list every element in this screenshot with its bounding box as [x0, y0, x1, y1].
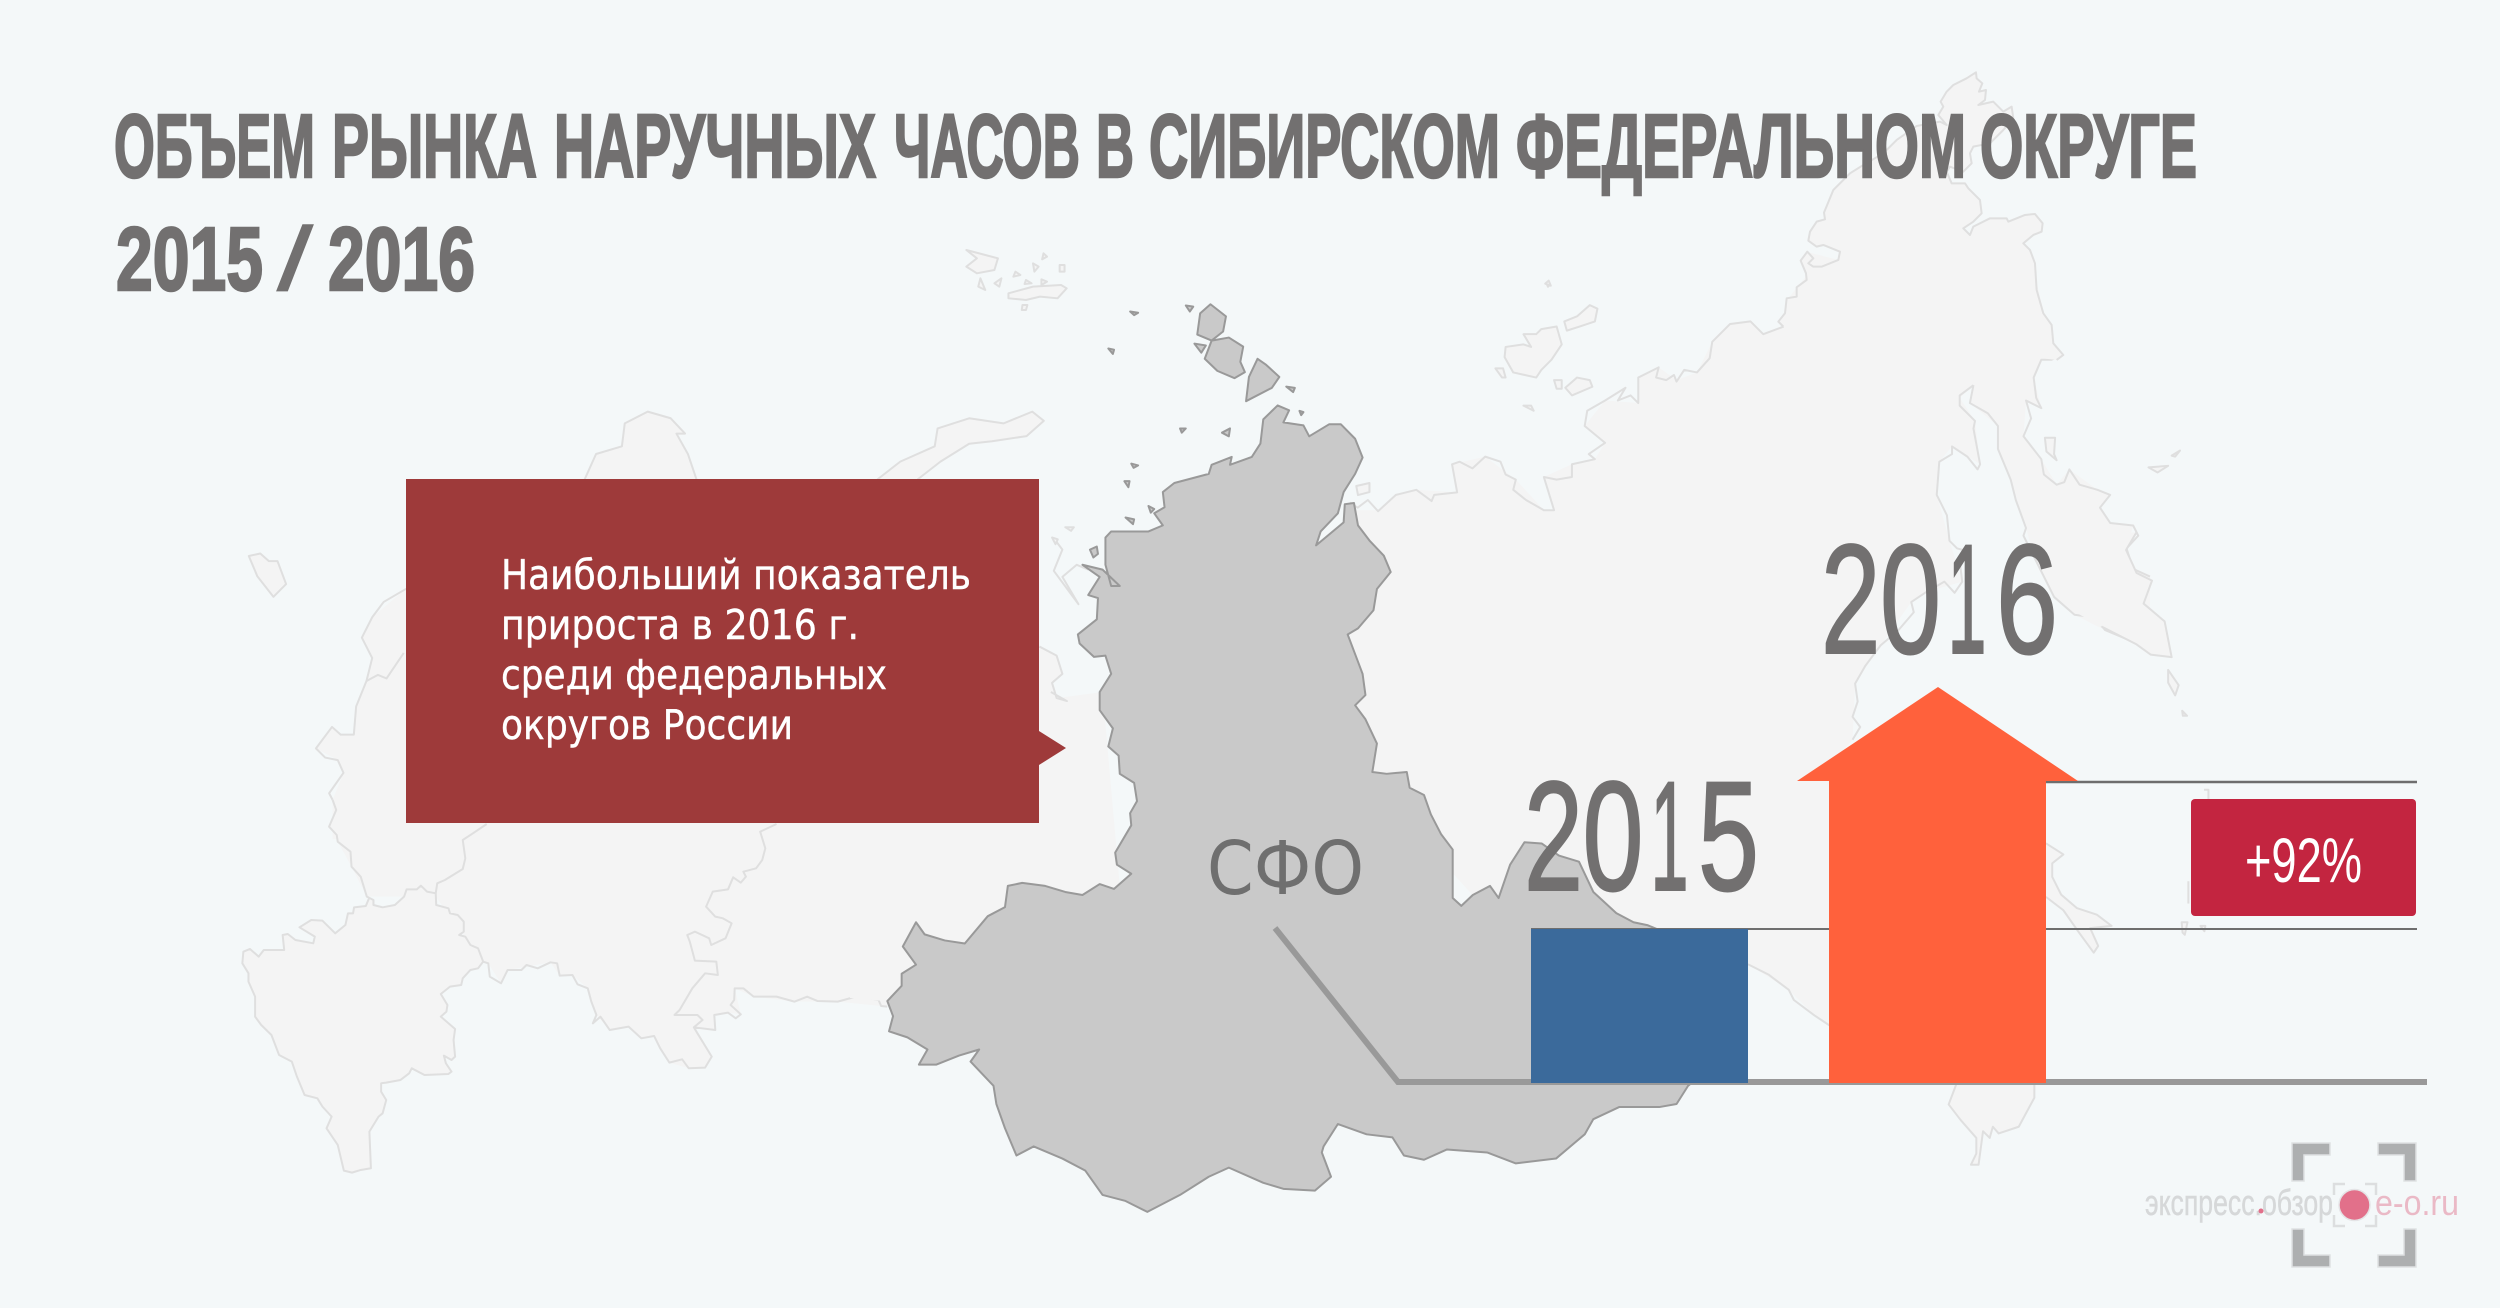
- map: Russia background: [242, 72, 2208, 1173]
- year label 2016: 2: [1821, 513, 1880, 687]
- year label 2015: 2: [1524, 750, 1583, 924]
- title: /: [277, 210, 313, 310]
- title: ОБЪЕМ: [114, 97, 315, 197]
- title: РЫНКА: [332, 97, 537, 197]
- year label 2015: 0: [1582, 750, 1644, 924]
- guide line: 2016 level: [2046, 781, 2417, 783]
- title: 2016: [328, 210, 475, 310]
- logo: express-obzor: e-o.ru: [2375, 1182, 2459, 1223]
- year label 2016: [1821, 513, 2058, 687]
- title: ЧАСОВ: [894, 97, 1080, 197]
- year label 2016: 0: [1880, 513, 1941, 687]
- title: НАРУЧНЫХ: [554, 97, 876, 197]
- callout: largest growth: среди федеральных: [501, 651, 887, 699]
- badge: +92%: +92%: [2245, 826, 2362, 896]
- district label: СФО: [1207, 826, 1364, 912]
- leader line from district label to chart baseline: [1275, 928, 2427, 1082]
- year label 2016: 6: [1996, 513, 2058, 687]
- year label 2015: 1: [1650, 750, 1688, 924]
- title: 2015: [116, 210, 263, 310]
- callout: largest growth: Наибольший показатель: [501, 551, 971, 599]
- year label 2015: [1524, 750, 1759, 924]
- title: В: [1096, 97, 1134, 197]
- bar: 2015: [1531, 929, 1748, 1083]
- arrow bar: 2016: [1797, 687, 2078, 1083]
- year label 2015: 5: [1698, 750, 1759, 924]
- title: ОКРУГЕ: [1980, 97, 2197, 197]
- callout: largest growth: округов России: [501, 701, 793, 749]
- callout: largest growth: [406, 479, 1066, 823]
- year label 2016: 1: [1948, 513, 1986, 687]
- title: СИБИРСКОМ: [1149, 97, 1500, 197]
- callout: largest growth: прироста в 2016 г.: [501, 601, 859, 649]
- badge: +92%: [2191, 799, 2416, 916]
- logo: express-obzor: [2145, 1143, 2459, 1267]
- title: ФЕДЕРАЛЬНОМ: [1516, 97, 1966, 197]
- title: [114, 97, 2197, 310]
- map: Siberian Federal District: [887, 304, 1711, 1212]
- logo: express-obzor: экспресс.обзор: [2145, 1182, 2333, 1223]
- guide line: 2015 level: [1531, 928, 2417, 930]
